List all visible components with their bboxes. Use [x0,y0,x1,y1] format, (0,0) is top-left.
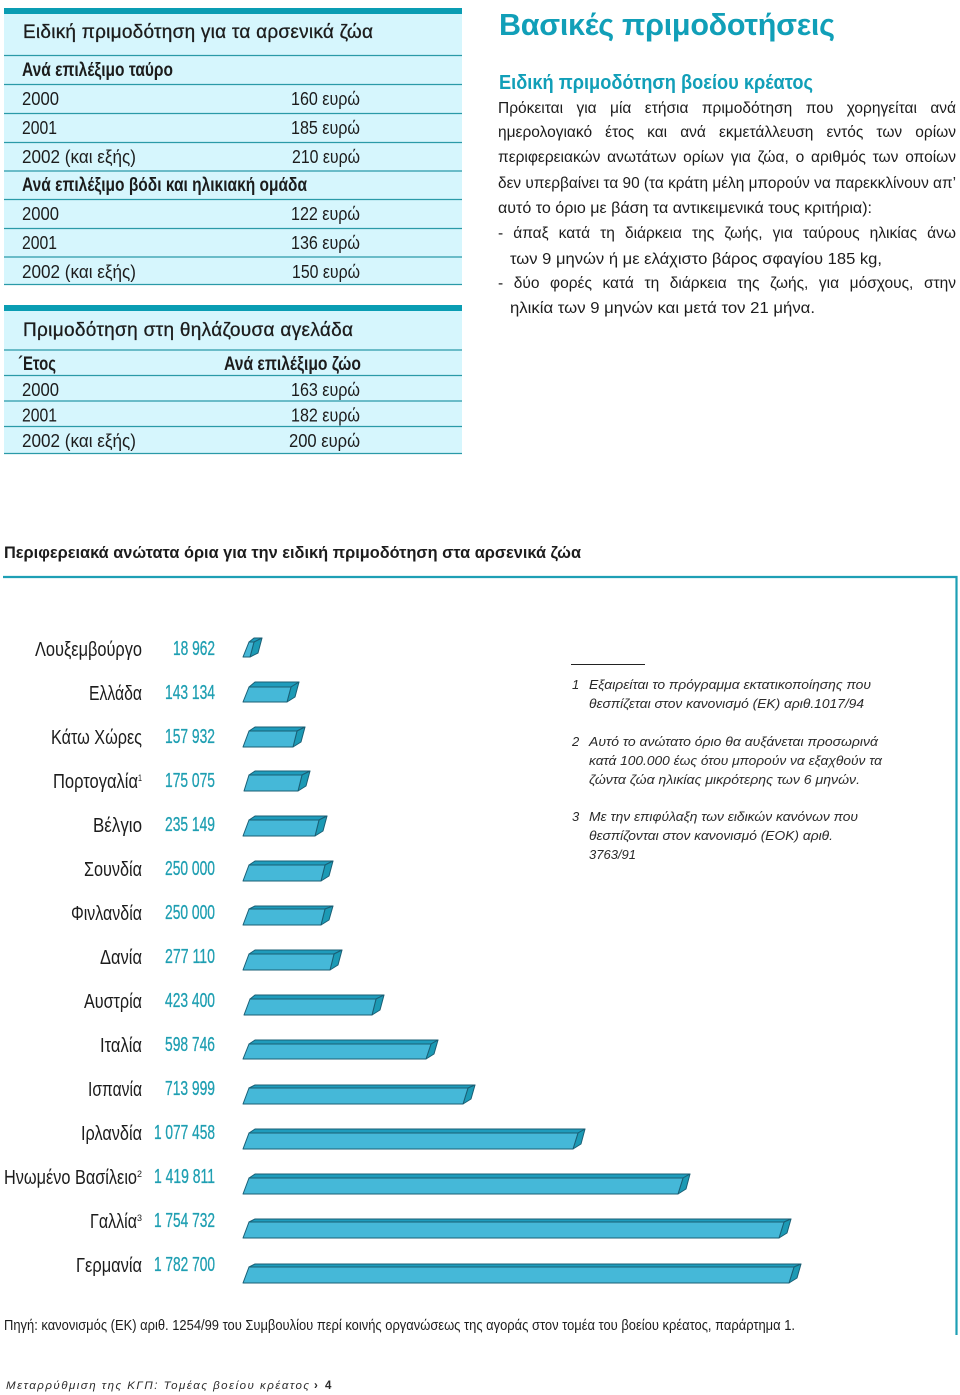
country labels: Ιρλανδία [81,1123,142,1145]
panel heading: Ειδική πριμοδότηση για τα αρσενικά ζώα [23,22,373,43]
table rows: per eligible bull: 185 ευρώ [291,117,360,138]
bar: France [243,1219,791,1238]
page footer: 4 [325,1380,332,1392]
footnote 3: Με την επιφύλαξη των ειδικών κανόνων που [589,809,858,824]
country labels: Φινλανδία [71,903,142,925]
page footer: › [314,1380,318,1392]
table rows: 182 ευρώ [291,404,360,426]
footnote 1: 1 [572,677,579,692]
country labels: Γαλλία [90,1211,137,1233]
country labels: Βέλγιο [93,815,142,837]
table rows: per eligible steer and age group: 2002 (και εξής) [22,261,136,282]
country values: 277 110 [165,946,215,968]
subheading: Ειδική πριμοδότηση βοείου κρέατος [499,72,813,94]
body text: justified lines: - δύο φορές κατά τη διάρκεια της ζωής, για μόσχους, στην [498,275,956,292]
footnote 2: 2 [571,734,580,749]
body text: justified lines: - άπαξ κατά τη διάρκεια της ζωής, για ταύρους ηλικίας άνω [498,225,956,242]
footnote 2: Αυτό το ανώτατο όριο θα αυξάνεται προσωρινά [588,734,879,749]
country labels: Κάτω Χώρες [51,727,142,749]
footnote 1: θεσπίζεται στον κανονισμό (ΕΚ) αριθ.1017/94 [589,696,864,711]
body text: justified lines: Πρόκειται για μία ετήσια πριμοδότηση που χορηγείται ανά [498,100,956,117]
main title: Βασικές πριμοδοτήσεις [499,8,835,42]
country labels: Πορτογαλία [53,771,138,793]
table rows: 2001 [22,404,57,426]
table rows: per eligible steer and age group: 2000 [22,203,59,224]
footnote 3 [572,809,858,862]
bar: Italy [243,1040,438,1059]
footnote 3: θεσπίζονται στον κανονισμό (ΕΟΚ) αριθ. [589,828,833,843]
country values: 143 134 [165,682,215,704]
country labels: Ελλάδα [89,683,142,705]
body text: justified lines [498,100,956,292]
footnote 3: 3763/91 [589,847,636,862]
country labels: Ιταλία [100,1035,142,1057]
body text: non-justified lines: των 9 μηνών ή με ελάχιστο βάρος σφαγίου 185 kg, [510,251,882,268]
bar: Austria [244,995,384,1015]
body text: justified lines: περιφερειακών ανωτάτων ορίων για ζώα, ο αριθμός των οποίων [498,149,956,166]
country values: 598 746 [165,1034,215,1056]
body text: non-justified lines [498,175,956,317]
table rows: 163 ευρώ [291,379,360,400]
country values: 157 932 [165,726,215,748]
bar: Sweden [243,861,333,881]
panel: suckler cow premium [4,305,462,454]
table rows: per eligible bull: 160 ευρώ [291,88,360,109]
bar: Netherlands [243,727,305,747]
table rows: per eligible bull [22,60,360,167]
country labels: Λουξεμβούργο [35,639,142,661]
body text: non-justified lines: δεν υπερβαίνει τα 90 (τα κράτη μέλη μπορούν να παρεκκλίνουν απ’ [498,175,956,192]
country labels [4,639,142,1277]
page footer: Μεταρρύθμιση της ΚΓΠ: Τομέας βοείου κρέατος [6,1380,309,1392]
country labels: Ισπανία [88,1079,142,1101]
table rows: per eligible steer and age group: 2001 [22,232,57,253]
footnote 1: Εξαιρείται το πρόγραμμα εκτατικοποίησης που [589,677,871,692]
country values: 250 000 [165,858,215,880]
footnote 2 [571,734,883,787]
country values: 250 000 [165,902,215,924]
table rows: per eligible steer and age group: 150 ευρώ [292,261,360,282]
country values: 713 999 [165,1078,215,1100]
country values [154,638,215,1276]
footnote 1 [572,677,871,711]
bar: United Kingdom [243,1174,690,1194]
footnotes [571,664,883,862]
table rows: per eligible bull: 2002 (και εξής) [22,146,136,167]
body text: non-justified lines: αυτό το όριο με βάση τα αντικειμενικά τους κριτήρια): [498,200,872,217]
panel: special premium for male animals [4,8,462,285]
country labels: Σουνδία [84,859,142,881]
bar: Ireland [243,1129,585,1149]
country labels: Γερμανία [76,1255,142,1277]
country values: 18 962 [173,638,215,660]
country labels: 2 [137,1169,142,1179]
body text: non-justified lines: ηλικία των 9 μηνών και μετά τον 21 μήνα. [510,300,815,317]
country values: 1 782 700 [154,1254,215,1276]
table rows: per eligible steer and age group [22,175,360,282]
table rows [18,354,361,451]
source note: Πηγή: κανονισμός (ΕΚ) αριθ. 1254/99 του Συμβουλίου περί κοινής οργανώσεως της αγοράς στον τομέα του βοείου κρέατος, παράρτημα 1. [4,1318,795,1334]
bar: Denmark [243,950,342,970]
country labels: Αυστρία [84,991,142,1013]
table rows: per eligible bull: Ανά επιλέξιμο ταύρο [22,60,173,81]
footnote 3: 3 [572,809,580,824]
bar chart [243,638,801,1283]
bar: Luxembourg [243,638,262,657]
country values: 175 075 [165,770,215,792]
country values: 1 754 732 [154,1210,215,1232]
table rows: per eligible bull: 2000 [22,88,59,109]
table rows: per eligible steer and age group: Ανά επιλέξιμο βόδι και ηλικιακή ομάδα [22,175,307,196]
table rows: per eligible steer and age group: 122 ευρώ [291,203,360,224]
bar: Finland [243,906,333,925]
country values: 235 149 [165,814,215,836]
country labels: 3 [137,1213,142,1223]
country labels: 1 [138,773,142,783]
country labels: Δανία [100,947,142,969]
table rows: per eligible steer and age group: 136 ευρώ [291,232,360,253]
country labels: Ηνωμένο Βασίλειο [4,1167,137,1189]
body text: justified lines: ημερολογιακό έτος και ανά εκμετάλλευση εντός των ορίων [498,124,956,141]
bar: Portugal [244,771,310,791]
table rows: 2002 (και εξής) [22,430,136,451]
table rows: per eligible bull: 2001 [22,117,57,138]
footnote 2: ζώντα ζώα ηλικίας μικρότερης των 6 μηνών. [589,772,860,787]
chart heading: Περιφερειακά ανώτατα όρια για την ειδική πριμοδότηση στα αρσενικά ζώα [4,544,581,562]
bar: Belgium [243,816,327,836]
bar: Greece [243,682,299,702]
table rows: 2000 [22,379,59,400]
bar: Spain [243,1085,475,1104]
chart frame [3,577,956,1335]
country values: 1 077 458 [154,1122,215,1144]
table rows: ´Ετος [18,354,56,375]
bar: Germany [243,1264,801,1283]
table rows: per eligible bull: 210 ευρώ [292,146,360,167]
country values: 1 419 811 [154,1166,215,1188]
table rows: Ανά επιλέξιμο ζώο [224,354,361,375]
footnote 2: κατά 100.000 έως ότου μπορούν να εξαχθούν τα [589,753,883,768]
panel heading: Πριμοδότηση στη θηλάζουσα αγελάδα [23,320,353,341]
table rows: 200 ευρώ [289,430,360,451]
country values: 423 400 [165,990,215,1012]
